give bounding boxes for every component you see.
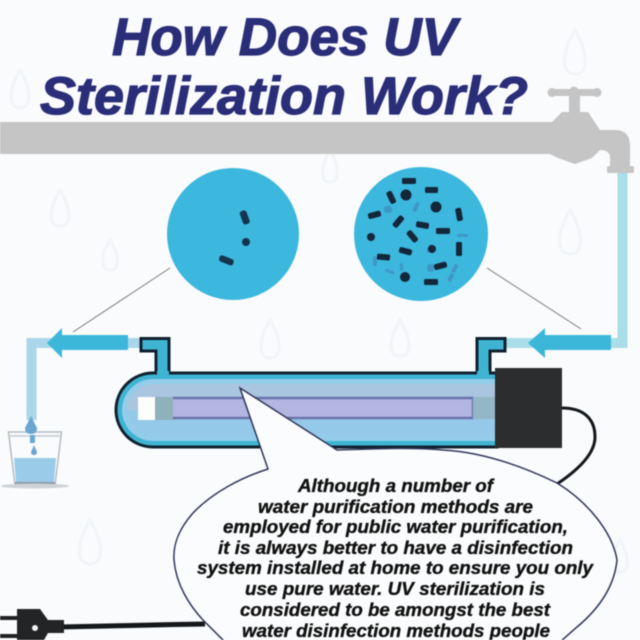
callout text: water purification methods are	[258, 497, 533, 517]
callout text: considered to be amongst the best	[240, 600, 551, 620]
title: Sterilization Work?	[40, 67, 528, 126]
glass of water	[1, 416, 69, 488]
white lamp cap	[138, 397, 155, 420]
outlet water pipe	[32, 343, 140, 420]
arrow: water flowing out of tube	[47, 328, 128, 358]
outlet fitting	[141, 338, 169, 372]
arrow: water flowing into tube	[528, 328, 611, 358]
plug cable	[60, 624, 205, 627]
inlet water pipe	[505, 170, 622, 343]
callout: explanation speech bubble	[174, 388, 617, 640]
callout text: system installed at home to ensure you only	[197, 558, 594, 578]
power ballast box	[495, 368, 562, 448]
lamp end connector	[155, 397, 175, 420]
water drops	[25, 416, 37, 455]
UV lamp	[173, 398, 473, 418]
callout text: employed for public water purification,	[223, 517, 568, 537]
icon: electric plug	[0, 609, 64, 640]
title: How Does UV	[112, 8, 462, 67]
callout text	[197, 476, 594, 640]
UV sterilizer tube	[116, 371, 497, 447]
inlet fitting	[477, 338, 505, 372]
faucet and main pipe	[0, 86, 634, 173]
panel: treated water sample	[167, 168, 299, 300]
callout text: Although a number of	[297, 476, 495, 496]
leader line: treated sample	[73, 268, 170, 332]
panel: untreated water sample	[354, 167, 488, 301]
title	[40, 8, 528, 126]
callout text: it is always better to have a disinfection	[218, 538, 573, 558]
power cord to ballast	[557, 408, 595, 484]
leader line: untreated sample	[487, 268, 581, 329]
callout text: use pure water. UV sterilization is	[245, 579, 545, 599]
